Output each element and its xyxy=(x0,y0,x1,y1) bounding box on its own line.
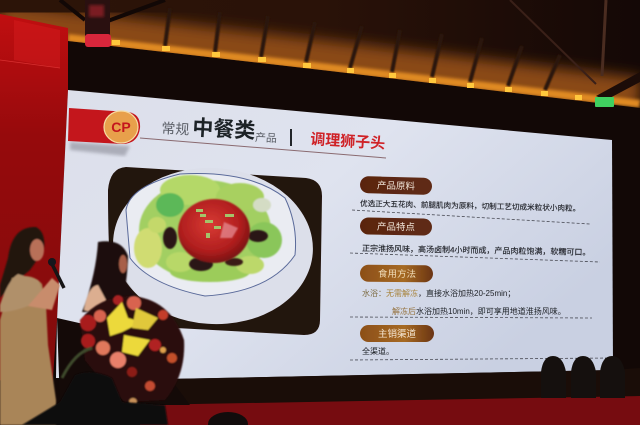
lamp: green xyxy=(595,97,614,107)
food photo xyxy=(108,161,322,335)
CP logo: CP xyxy=(111,119,131,135)
title divider xyxy=(290,129,292,146)
garnish xyxy=(196,209,234,238)
title: category: 常规 xyxy=(161,120,190,138)
pill label: 产品原料 xyxy=(377,180,416,193)
section: channels xyxy=(350,325,612,360)
meatball xyxy=(178,199,250,263)
section: features xyxy=(350,217,600,262)
details column xyxy=(350,176,612,360)
title: category xyxy=(161,115,278,145)
sauce highlight xyxy=(220,222,238,238)
pill label xyxy=(360,176,432,195)
body text xyxy=(362,288,566,316)
title: product name: 调理狮子头 xyxy=(310,131,386,153)
bouquet xyxy=(62,295,184,406)
lamp: red xyxy=(85,34,111,47)
red side panel xyxy=(0,14,68,420)
pill label: 食用方法 xyxy=(378,268,416,280)
body text: 水浴：无需解冻，直接水浴加热20-25min； xyxy=(362,288,515,298)
plate xyxy=(108,161,318,331)
pill label: 产品特点 xyxy=(377,221,416,233)
section: ingredients xyxy=(352,176,590,224)
podium xyxy=(57,318,190,405)
title: category: 产品 xyxy=(255,130,277,145)
pill label xyxy=(360,265,433,282)
slide header xyxy=(68,108,386,158)
floor xyxy=(140,395,640,425)
projection screen xyxy=(56,90,613,379)
stage riser xyxy=(140,368,640,405)
presenter: left xyxy=(0,227,60,425)
microphone xyxy=(48,258,64,288)
ribbon shadow xyxy=(70,142,130,156)
title: category: 中餐类 xyxy=(192,117,256,143)
presenter: right xyxy=(82,241,138,316)
foreground silhouette xyxy=(22,372,168,425)
header rule xyxy=(140,138,386,158)
wooden ceiling xyxy=(0,0,640,110)
dark backdrop xyxy=(108,167,322,335)
lettuce xyxy=(134,175,282,282)
pill label xyxy=(360,325,434,342)
sauce xyxy=(163,227,268,271)
audience head xyxy=(208,412,248,425)
stage lights xyxy=(541,356,625,398)
body text: 解冻后水浴加热10min，即可享用地道淮扬风味。 xyxy=(392,306,566,316)
body text: 正宗淮扬风味，高汤卤制4小时而成，产品肉粒饱满，软糯可口。 xyxy=(362,243,591,257)
CP logo xyxy=(104,111,138,143)
body text: 全渠道。 xyxy=(362,346,394,356)
red logo ribbon xyxy=(68,108,140,144)
pill text: 主销渠道 xyxy=(378,328,416,340)
plate inner rim xyxy=(126,174,296,296)
pill label xyxy=(360,217,432,236)
body text: 优选正大五花肉、前腿肌肉为原料，切制工艺切成米粒状小肉粒。 xyxy=(360,198,580,213)
section: method xyxy=(350,265,592,318)
